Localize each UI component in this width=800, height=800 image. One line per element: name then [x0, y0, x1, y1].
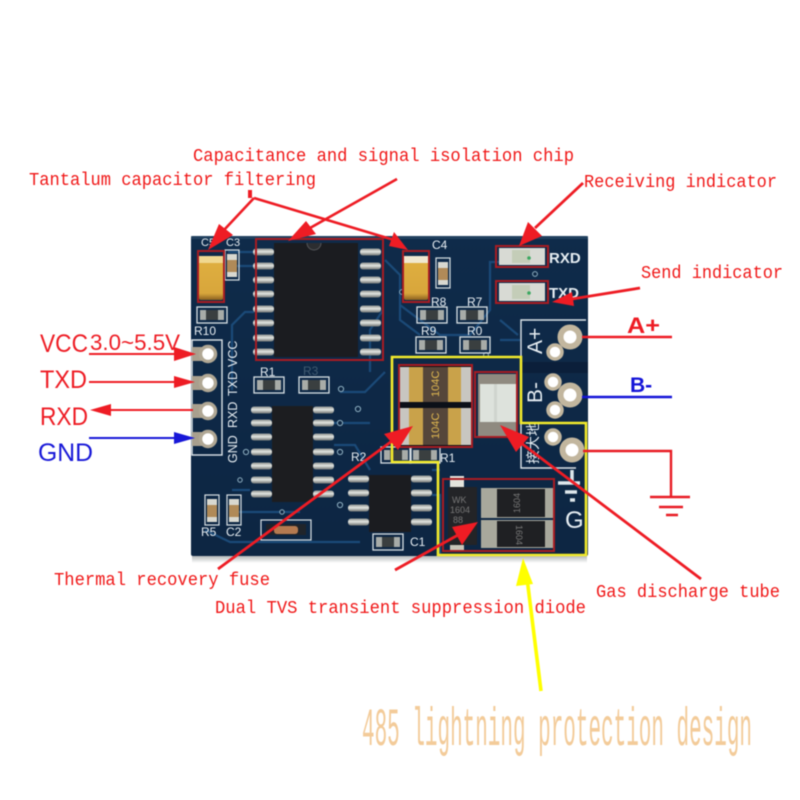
- silkscreen labels: A+: [524, 328, 547, 354]
- silkscreen labels: R7: [467, 295, 483, 309]
- gas discharge tube: [478, 374, 517, 436]
- silkscreen labels: R8: [431, 295, 447, 309]
- arrow: TVS diode: [395, 522, 478, 570]
- arrow: receiving indicator: [519, 183, 583, 246]
- label: TVS diode: Dual TVS transient suppression diode: [215, 599, 586, 619]
- LEDs: [499, 248, 545, 301]
- silkscreen labels: R2: [351, 450, 367, 464]
- thermal fuses: [399, 365, 472, 447]
- label: capacitance and isolation chip: Capacitance and signal isolation chip: [193, 147, 574, 167]
- line: A+: [582, 336, 672, 338]
- label: RXD: RXD: [40, 403, 88, 431]
- silkscreen labels: C2: [226, 525, 242, 539]
- silkscreen labels: TXD: [549, 285, 579, 302]
- arrow: GND: [89, 432, 195, 444]
- arrow: VCC: [89, 347, 196, 361]
- line: B-: [582, 396, 672, 398]
- tantalum capacitors: [199, 256, 428, 300]
- label: voltage range: 3.0~5.5V: [90, 330, 180, 355]
- silkscreen labels: C4: [432, 238, 448, 252]
- board shadow: [192, 556, 587, 563]
- TVS diodes: 1604: [450, 505, 470, 515]
- arrow: send indicator: [552, 288, 640, 306]
- silkscreen labels: R1: [440, 451, 456, 465]
- arrow: lightning protection: [516, 558, 541, 691]
- arrow: TXD: [89, 376, 195, 388]
- silkscreen labels: R10: [194, 324, 216, 338]
- label: A+: A+: [627, 313, 660, 338]
- dark connector band: [522, 362, 588, 373]
- arrow: isolation chip: [288, 179, 397, 241]
- thermal fuses: 104C: [430, 371, 442, 397]
- yellow protection outline: [392, 357, 586, 555]
- label: thermal fuse: Thermal recovery fuse: [54, 571, 270, 591]
- label: VCC: VCC: [40, 330, 88, 358]
- silkscreen labels: C1: [410, 535, 426, 549]
- label: TXD: TXD: [40, 366, 87, 394]
- silkscreen labels: R0: [467, 324, 483, 338]
- TVS diodes: 1604: [512, 493, 522, 513]
- silkscreen labels: RXD: [226, 402, 240, 428]
- transceiver chip: [251, 406, 334, 502]
- diode D1: [261, 520, 311, 540]
- TVS diodes: [448, 476, 553, 551]
- silkscreen labels: RXD: [549, 250, 581, 267]
- silkscreen labels: C5: [201, 237, 215, 249]
- silkscreen labels: R1: [260, 365, 276, 379]
- silkscreen labels: 接大地: [525, 422, 541, 464]
- copper traces: [205, 252, 520, 555]
- silkscreen labels: R3: [303, 364, 319, 378]
- label: B-: B-: [630, 374, 652, 397]
- label: receiving indicator: Receiving indicator: [584, 173, 777, 193]
- silkscreen labels: R9: [421, 324, 437, 338]
- TVS diodes: 1604: [514, 525, 524, 545]
- silkscreen labels: C3: [226, 237, 240, 249]
- silkscreen labels: G: [565, 507, 584, 534]
- isolation chip: [253, 243, 381, 357]
- red highlight boxes: [198, 239, 554, 551]
- PCB board: [191, 236, 588, 556]
- small parts: [197, 250, 490, 550]
- ground connection and symbol: [583, 451, 690, 515]
- connector pads: [546, 328, 582, 460]
- label: send indicator: Send indicator: [641, 264, 783, 284]
- TVS diodes: 88: [453, 515, 463, 525]
- label: tantalum capacitor: Tantalum capacitor filtering: [29, 171, 316, 191]
- arrow: thermal fuse: [218, 426, 413, 569]
- TVS diodes: WK: [452, 495, 466, 505]
- via holes: [238, 272, 537, 514]
- silkscreen labels: GND: [226, 435, 240, 463]
- header pin holes: [192, 340, 222, 455]
- silkscreen labels: B-: [524, 382, 547, 403]
- arrow: tantalum capacitors: [208, 190, 408, 250]
- label: gas discharge tube: Gas discharge tube: [596, 583, 780, 603]
- silkscreen labels: R5: [201, 525, 217, 539]
- silkscreen labels: VCC: [226, 341, 240, 367]
- arrow: gas discharge tube: [500, 425, 701, 579]
- thermal fuses: 104C: [430, 413, 442, 439]
- label: GND: GND: [38, 439, 93, 467]
- silkscreen labels: [194, 237, 586, 549]
- SOP8 chip: [348, 475, 432, 532]
- arrow: RXD: [90, 404, 193, 416]
- silkscreen labels: TXD: [226, 371, 240, 396]
